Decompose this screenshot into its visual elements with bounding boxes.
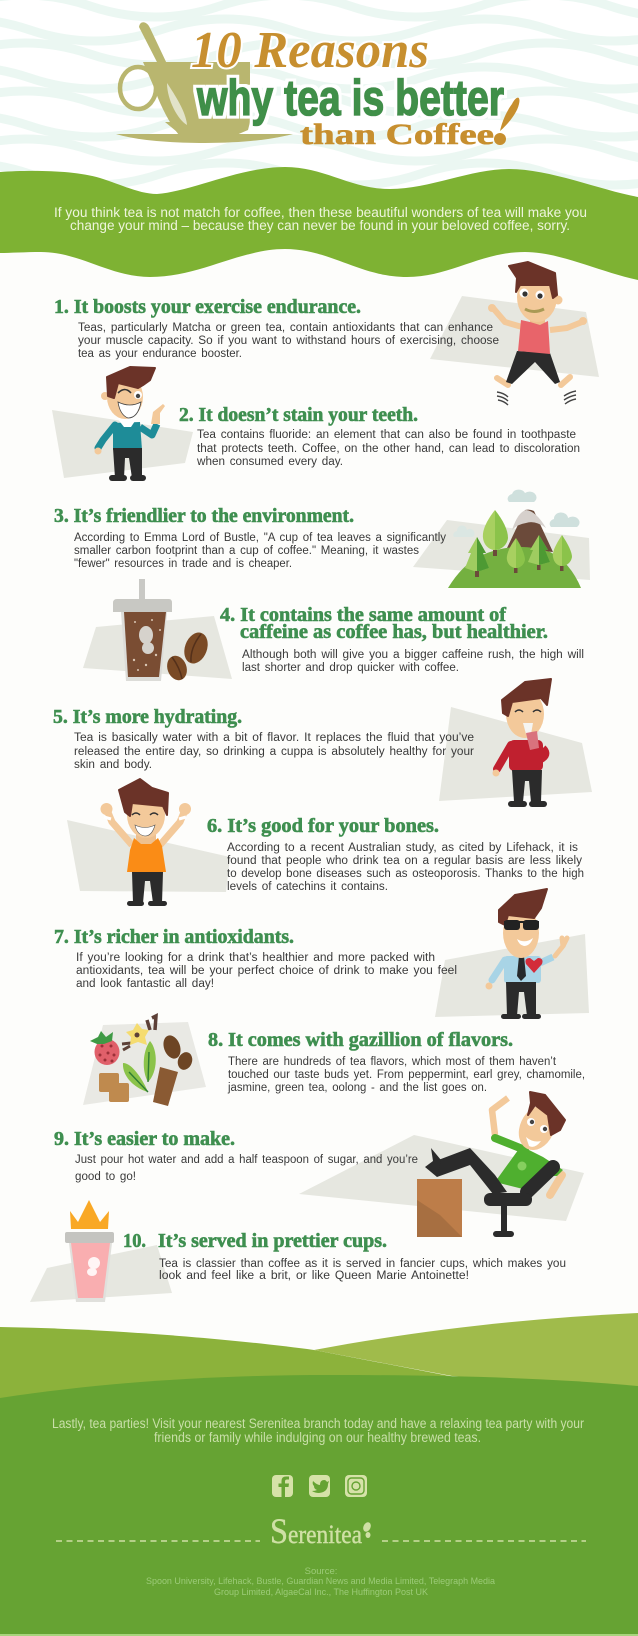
icon: twitter — [309, 1475, 330, 1497]
text 3: smaller carbon footprint than a cup of coffee." Meaning, it wastes — [74, 545, 419, 557]
icon: man drinking tea — [492, 679, 551, 807]
panel: reason 3 — [54, 490, 590, 588]
intro text: change your mind – because they can never be found in your beloved coffee, sorry. — [70, 218, 570, 233]
title line: why tea is better: why tea is better — [196, 70, 504, 126]
text 1: tea as your endurance booster. — [78, 348, 242, 360]
text 6: levels of catechins it contains. — [227, 881, 388, 893]
text 6: to develop bone diseases such as osteoporosis. Thanks to the high — [227, 868, 584, 880]
icon: man with sunglasses and heart — [486, 889, 567, 1019]
text 8: jasmine, green tea, oolong - and the list goes on. — [227, 1082, 487, 1094]
text 9: good to go! — [75, 1171, 136, 1183]
heading 7: 7. It’s richer in antioxidants. — [54, 927, 294, 948]
icon: strawberry, vanilla, leaves, beans, chocolate — [90, 1016, 195, 1106]
panel: reason 10 — [30, 1200, 566, 1302]
text 8: There are hundreds of tea flavors, which most of them haven’t — [228, 1056, 557, 1068]
source credits — [146, 1566, 496, 1598]
text 6: According to a recent Australian study, as cited by Lifehack, it is — [227, 842, 578, 854]
heading 8: 8. It comes with gazillion of flavors. — [208, 1030, 513, 1051]
text 10: Tea is classier than coffee as it is served in fancier cups, which makes you — [159, 1258, 566, 1270]
closing text: Lastly, tea parties! Visit your nearest Serenitea branch today and have a relaxing tea party with your — [52, 1416, 584, 1431]
text 4: last shorter and drop quicker with coffee. — [242, 662, 459, 674]
source credits: Spoon University, Lifehack, Bustle, Guardian News and Media Limited, Telegraph Media — [146, 1576, 496, 1587]
panel: footer hills and green background — [0, 1313, 638, 1636]
panel: reason 1 — [54, 262, 599, 405]
logo: Serenitea with dashed rules: Serenitea — [270, 1511, 362, 1551]
heading 5: 5. It’s more hydrating. — [53, 707, 242, 728]
heading 3: 3. It’s friendlier to the environment. — [54, 506, 354, 527]
title line: than Coffee: than Coffee — [300, 118, 494, 151]
text 1 — [78, 322, 499, 360]
icon: crown — [70, 1200, 109, 1229]
heading 4: caffeine as coffee has, but healthier. — [240, 622, 548, 643]
heading 2: 2. It doesn’t stain your teeth. — [179, 405, 418, 426]
intro text — [54, 205, 587, 233]
text 5: skin and body. — [74, 759, 152, 771]
icon: facebook — [272, 1475, 293, 1497]
closing text — [52, 1416, 584, 1445]
heading 10: 10. — [123, 1231, 146, 1252]
source credits: Source: — [305, 1566, 337, 1577]
text 4 — [242, 649, 584, 674]
heading 9: 9. It’s easier to make. — [54, 1129, 235, 1150]
icon: instagram — [345, 1475, 367, 1497]
panel: reason 6 — [67, 779, 584, 906]
logo: Serenitea with dashed rules — [56, 1511, 586, 1551]
text 3: "fewer" resources in trade and is cheaper. — [74, 558, 292, 570]
text 7: If you’re looking for a drink that’s healthier and more packed with — [76, 952, 435, 964]
text 3: According to Emma Lord of Bustle, "A cup of tea leaves a significantly — [74, 532, 446, 544]
panel: reason 2 — [52, 367, 580, 481]
text 10: look and feel like a brit, or like Queen Marie Antoinette! — [159, 1270, 469, 1282]
icon: tea cup and saucer — [116, 22, 293, 143]
heading 6: 6. It’s good for your bones. — [207, 816, 439, 837]
text 6 — [227, 842, 584, 893]
intro text: If you think tea is not match for coffee, then these beautiful wonders of tea will make you — [54, 205, 587, 220]
panel: reason 4 — [83, 579, 584, 683]
heading 4 — [220, 605, 548, 643]
text 3 — [74, 532, 446, 570]
icon: jumping man — [488, 262, 587, 405]
text 2: that protects teeth. Coffee, on the other hand, can lead to discoloration — [197, 443, 580, 455]
icon: green hill with trees and mountain — [448, 490, 581, 588]
text 2 — [196, 429, 580, 468]
icon: smiling man with thumb up — [94, 367, 165, 481]
text 5: released the entire day, so drinking a cuppa is absolutely healthy for your — [74, 746, 474, 758]
text 2: Tea contains fluoride: an element that can also be found in toothpaste — [197, 429, 576, 441]
source credits: Group Limited, AlgaeCal Inc., The Huffington Post UK — [214, 1587, 429, 1598]
text 5 — [74, 732, 474, 771]
text 5: Tea is basically water with a bit of flavor. It replaces the fluid that you’ve — [74, 732, 474, 744]
panel: reason 8 — [83, 1016, 585, 1106]
heading 1: 1. It boosts your exercise endurance. — [54, 297, 361, 318]
text 1: your muscle capacity. So if you want to withstand hours of exercising, choose — [78, 335, 499, 347]
text 7: and look fantastic all day! — [76, 978, 214, 990]
icon: man flexing arms up — [100, 779, 191, 906]
title: 10 Reasons why tea is better than Coffee — [116, 22, 519, 151]
icon: coffee beans — [164, 629, 212, 683]
text 8 — [227, 1056, 585, 1094]
title line: 10 Reasons: 10 Reasons — [191, 22, 429, 79]
icon: pink tea cup — [65, 1232, 114, 1302]
icon: man relaxing on stool with feet on box — [417, 1092, 565, 1237]
text 9: Just pour hot water and add a half teaspoon of sugar, and you’re — [75, 1154, 418, 1166]
text 7 — [76, 952, 457, 990]
icon: iced coffee cup — [113, 579, 172, 681]
text 7: antioxidants, tea will be your perfect choice of drink to make you feel — [76, 965, 457, 977]
text 9 — [75, 1154, 418, 1183]
text 8: touched our taste buds yet. From peppermint, earl grey, chamomile, — [228, 1069, 585, 1081]
heading 4: 4. It contains the same amount of — [220, 605, 507, 626]
panel: green intro wave — [0, 167, 638, 280]
closing text: friends or family while indulging on our healthy brewed teas. — [154, 1430, 481, 1445]
text 10 — [159, 1258, 566, 1282]
panel: reason 9 — [54, 1092, 584, 1237]
panel: reason 7 — [54, 889, 589, 1019]
text 6: found that people who drink tea on a regular basis are less likely — [227, 855, 582, 867]
text 2: when consumed every day. — [196, 456, 343, 468]
text 1: Teas, particularly Matcha or green tea, contain antioxidants that can enhance — [78, 322, 493, 334]
exclamation mark — [494, 98, 519, 145]
text 4: Although both will give you a bigger caffeine rush, the high will — [242, 649, 584, 661]
panel: reason 5 — [53, 679, 592, 807]
heading 10: It’s served in prettier cups. — [158, 1231, 387, 1252]
